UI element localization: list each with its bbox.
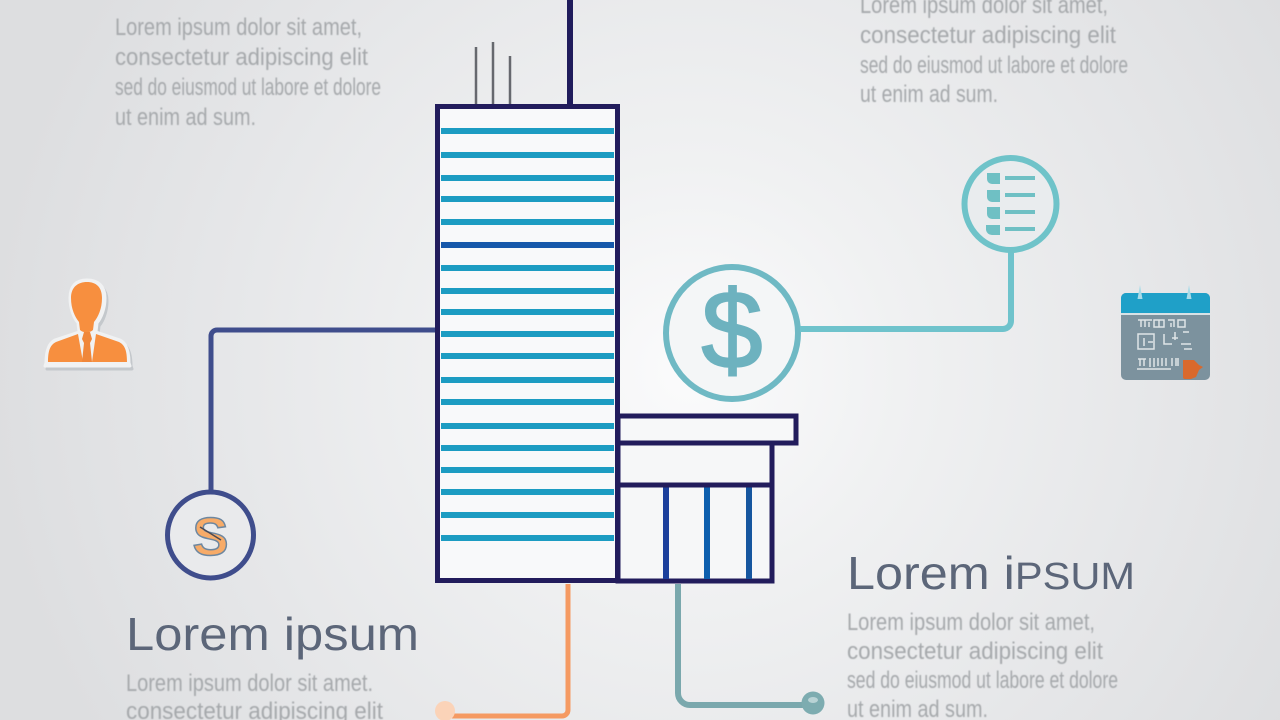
text block: bottom right: Lorem ipsum dolor sit amet, — [847, 609, 1095, 636]
text block: top right: consectetur adipiscing elit — [860, 22, 1116, 49]
connector: teal line — [800, 250, 1011, 329]
heading: bottom left: Lorem ipsum — [126, 608, 419, 660]
icon: checklist circle — [964, 158, 1056, 250]
text block: top left — [115, 14, 381, 131]
connector: orange line with end dot — [435, 584, 568, 720]
text block: top right: ut enim ad sum. — [860, 81, 998, 108]
text block: bottom right: consectetur adipiscing elit — [847, 638, 1103, 665]
text block: top right — [860, 0, 1128, 108]
icon: calendar — [1121, 285, 1210, 380]
heading: bottom right: Lorem i PSUM — [847, 547, 1135, 599]
icon: dollar circle — [666, 267, 798, 399]
icon: circle with orange S — [168, 492, 254, 578]
connector: top navy line — [567, 0, 573, 106]
tower body — [438, 106, 618, 580]
connector: grey teal line with end dot — [678, 584, 824, 714]
antennas — [476, 42, 510, 104]
tower window stripes — [441, 128, 614, 541]
icon: dollar circle: $ — [701, 269, 763, 392]
icon: circle with orange S: S — [192, 507, 229, 567]
connector: left navy line — [211, 330, 436, 492]
icon: orange person — [45, 280, 132, 369]
annex columns — [666, 486, 749, 579]
text block: top left: ut enim ad sum. — [115, 104, 256, 131]
text block: top right: sed do eiusmod ut labore et dolore — [860, 52, 1128, 79]
text block: bottom left: Lorem ipsum dolor sit amet. — [126, 670, 373, 697]
annex roof — [618, 416, 796, 443]
text block: top left: Lorem ipsum dolor sit amet, — [115, 14, 362, 41]
text block: bottom left — [126, 670, 383, 720]
text block: top left: sed do eiusmod ut labore et dolore — [115, 74, 381, 101]
text block: top left: consectetur adipiscing elit — [115, 44, 368, 71]
text block: bottom right — [847, 609, 1118, 720]
text block: bottom right: sed do eiusmod ut labore et dolore — [847, 667, 1118, 694]
annex body — [618, 443, 772, 581]
building: tower and annex — [438, 106, 796, 581]
annex divider — [618, 482, 772, 488]
